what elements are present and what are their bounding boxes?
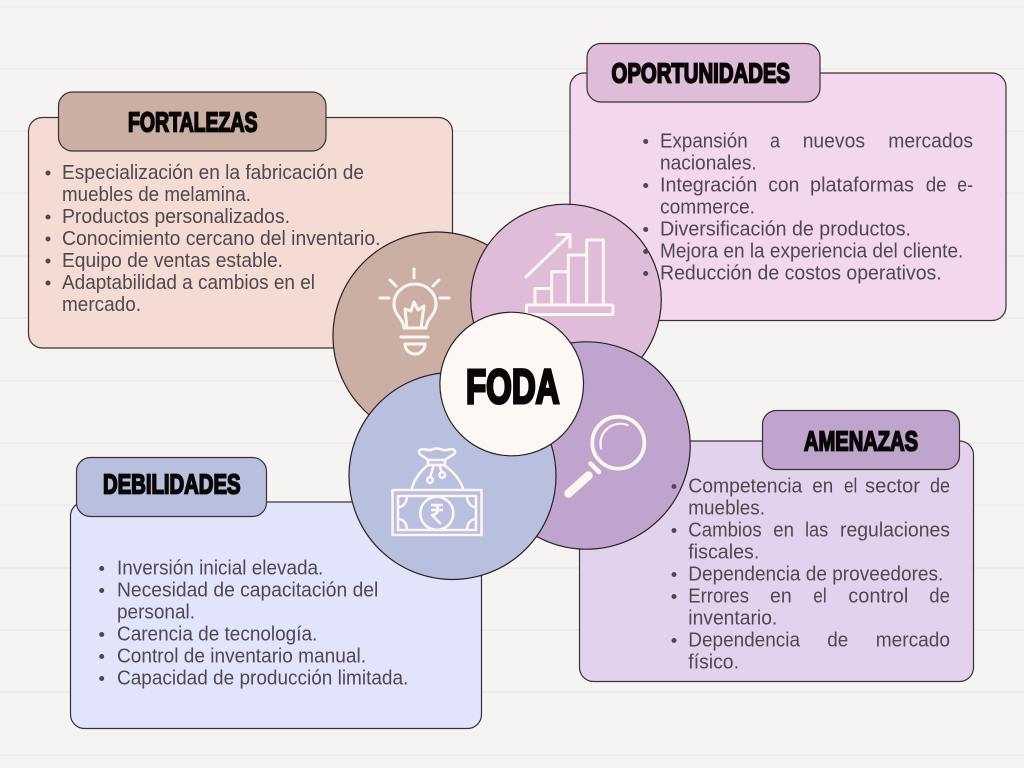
text block: amenazas list: el xyxy=(813,586,827,608)
text block: fortalezas list: Productos personalizados. xyxy=(62,206,290,228)
text block: oportunidades list: nuevos xyxy=(803,130,865,152)
text block: amenazas list: inventario. xyxy=(688,608,777,630)
text block: oportunidades list: Integración xyxy=(660,174,757,196)
text block: debilidades list: Inversión inicial elevada. xyxy=(117,558,323,580)
text block: fortalezas list: Conocimiento cercano del inventario. xyxy=(62,228,380,250)
text block: amenazas list: muebles. xyxy=(688,498,765,520)
text block: amenazas list: fiscales. xyxy=(688,542,759,564)
text block: amenazas list: Dependencia xyxy=(688,630,801,652)
panel: amenazas xyxy=(580,441,974,682)
heading: fortalezas: FORTALEZAS xyxy=(128,106,258,138)
text block: oportunidades list: con xyxy=(768,174,799,196)
text block: debilidades list: Necesidad de capacitación del xyxy=(117,580,378,602)
text block: oportunidades list: mercados xyxy=(888,130,973,152)
text block: amenazas list: control xyxy=(848,586,908,608)
heading: oportunidades: OPORTUNIDADES xyxy=(612,58,790,89)
circle: amenazas xyxy=(483,342,690,549)
title: FODA: FODA xyxy=(466,361,560,414)
text block: oportunidades list: plataformas xyxy=(810,174,914,196)
text block: amenazas list xyxy=(672,476,950,674)
text block: amenazas list: físico. xyxy=(688,652,739,674)
heading tab: oportunidades xyxy=(587,44,820,102)
text block: amenazas list: de xyxy=(930,476,950,498)
text block: debilidades list: Carencia de tecnología. xyxy=(117,624,317,646)
circle: center xyxy=(440,312,584,456)
text block: amenazas list: Cambios xyxy=(688,520,762,542)
icon: light bulb xyxy=(380,269,449,354)
circle: oportunidades xyxy=(471,204,661,395)
text block: amenazas list: Competencia xyxy=(688,476,803,498)
text block: oportunidades list: a xyxy=(770,130,781,152)
text block: debilidades list xyxy=(99,558,408,690)
text block: amenazas list: en xyxy=(812,476,833,498)
heading tab: amenazas xyxy=(762,410,960,470)
text block: amenazas list: el xyxy=(844,476,857,498)
text block: fortalezas list: Especialización en la fabricación de xyxy=(62,162,364,184)
text block: oportunidades list: e- xyxy=(957,174,973,196)
text block: oportunidades list: de xyxy=(926,174,947,196)
text block: amenazas list: de xyxy=(929,586,950,608)
text block: amenazas list: Errores xyxy=(688,586,749,608)
icon: growth chart xyxy=(526,234,613,314)
text block: amenazas list: regulaciones xyxy=(840,520,950,542)
text block: debilidades list: Control de inventario manual. xyxy=(117,646,366,668)
text block: oportunidades list: nacionales. xyxy=(660,152,757,174)
text block: fortalezas list: Adaptabilidad a cambios en el xyxy=(62,272,315,294)
text block: amenazas list: las xyxy=(805,520,828,542)
text block: oportunidades list: Reducción de costos operativos. xyxy=(660,262,942,284)
heading tab: fortalezas xyxy=(58,92,326,151)
text block: fortalezas list: mercado. xyxy=(62,294,141,316)
circle: debilidades xyxy=(349,372,556,580)
text block: oportunidades list: Expansión xyxy=(660,130,748,152)
icon: magnifying glass xyxy=(568,417,644,494)
text block: oportunidades list: Mejora en la experiencia del cliente. xyxy=(660,240,963,262)
panel: debilidades xyxy=(70,502,482,728)
text block: fortalezas list xyxy=(46,162,380,316)
text block: amenazas list: de xyxy=(827,630,848,652)
heading: amenazas: AMENAZAS xyxy=(804,426,918,457)
text block: amenazas list: mercado xyxy=(876,630,950,652)
panel: fortalezas xyxy=(28,118,452,348)
circle: fortalezas xyxy=(333,232,541,440)
text block: amenazas list: Dependencia de proveedores. xyxy=(688,564,943,586)
text block: oportunidades list: Diversificación de productos. xyxy=(660,218,911,240)
text block: debilidades list: Capacidad de producción limitada. xyxy=(117,668,408,690)
panel: oportunidades xyxy=(570,73,1006,320)
text block: amenazas list: en xyxy=(770,586,792,608)
text block: oportunidades list: commerce. xyxy=(660,196,755,218)
heading tab: debilidades xyxy=(76,458,266,516)
heading: debilidades: DEBILIDADES xyxy=(103,468,240,500)
text block: fortalezas list: muebles de melamina. xyxy=(62,184,251,206)
text block: amenazas list: sector xyxy=(865,476,920,498)
text block: oportunidades list xyxy=(643,130,973,284)
icon: money bag and banknote xyxy=(392,448,482,535)
text block: amenazas list: en xyxy=(773,520,794,542)
text block: debilidades list: personal. xyxy=(117,602,195,624)
text block: fortalezas list: Equipo de ventas estable. xyxy=(62,250,283,272)
